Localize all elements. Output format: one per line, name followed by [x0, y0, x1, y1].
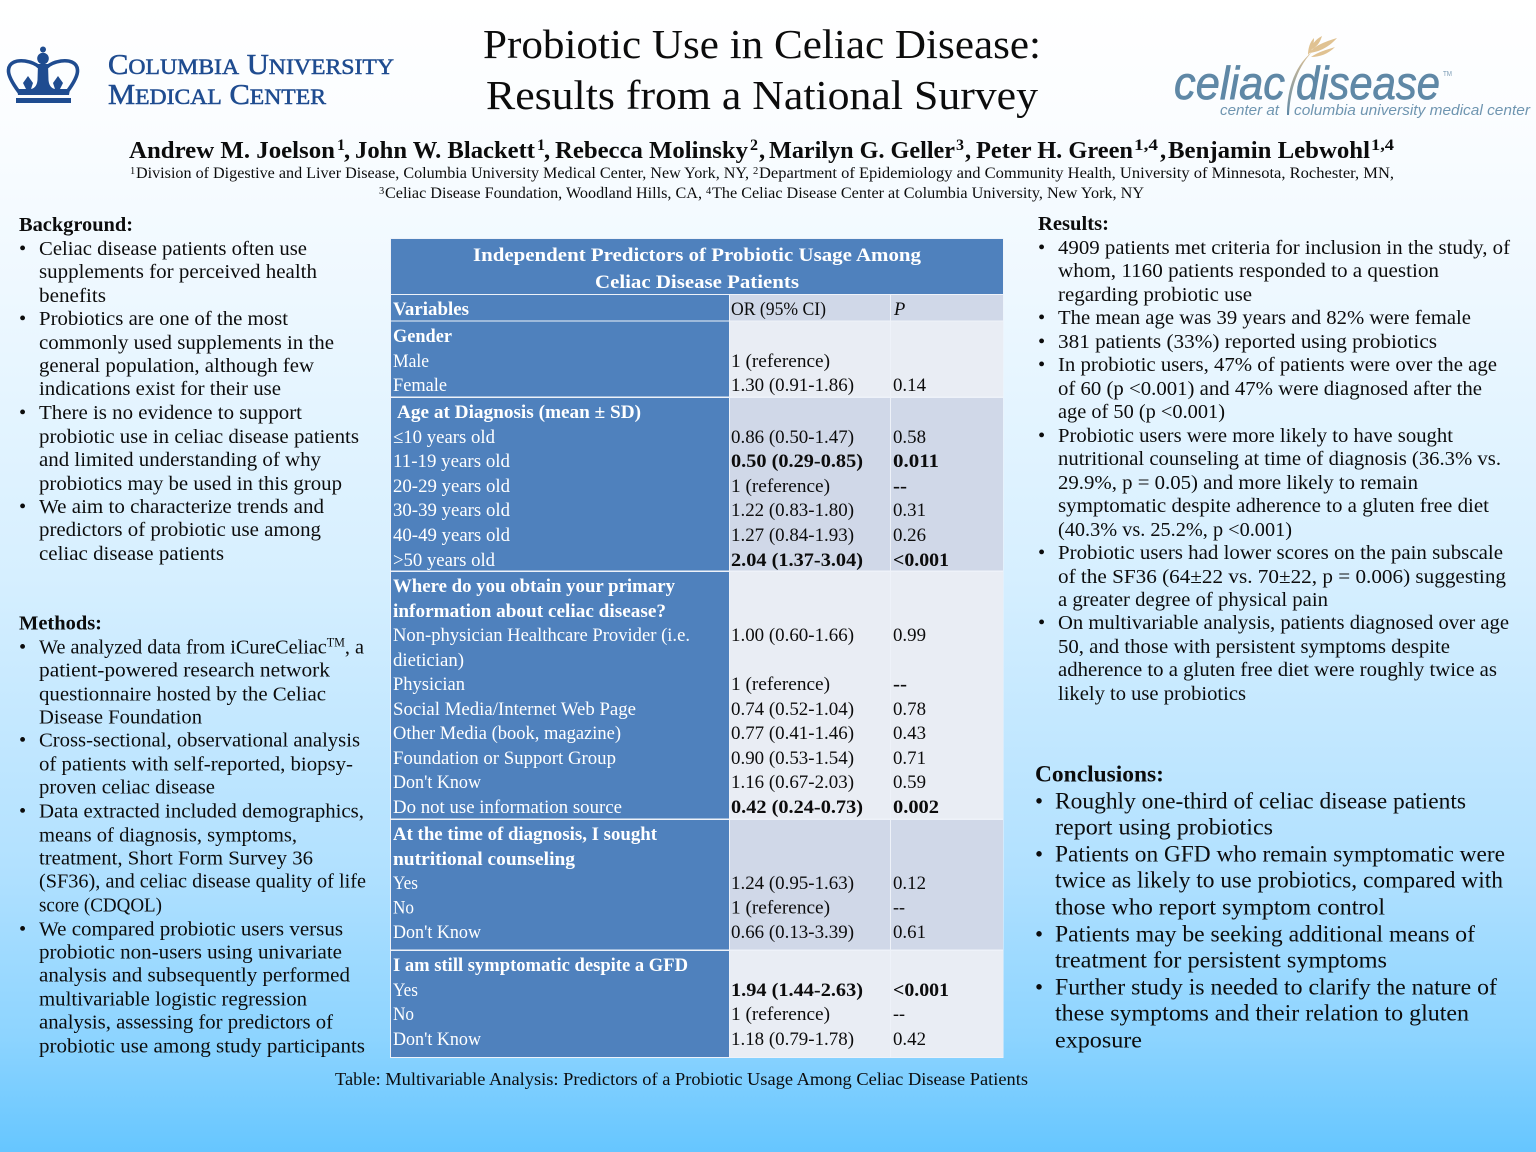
authors: ,: [544, 137, 550, 164]
icon: wheat stalk: [1287, 36, 1337, 115]
section: information source: 0.99: [893, 626, 926, 646]
section: information source: --: [893, 675, 907, 695]
bullet: counseling: Probiotic users were more likely to have sought: [1058, 425, 1453, 447]
section: gender: 1 (reference): [731, 352, 830, 372]
authors: [129, 137, 1394, 164]
section: nutritional counseling: At the time of diagnosis, I sought: [393, 825, 658, 845]
section: information source: 1 (reference): [731, 675, 830, 695]
section: information source: Non-physician Healthcare Provider (i.e.: [393, 626, 690, 646]
bullet: probiotic use rate: 381 patients (33%) reported using probiotics: [1058, 331, 1437, 353]
bullet: data source: patient-powered research network: [39, 660, 331, 682]
section: age at diagnosis: Age at Diagnosis (mean ± SD): [397, 403, 641, 423]
logo wordmark: TM: [1443, 71, 1452, 78]
bullet: common use: Probiotics are one of the most: [39, 308, 288, 330]
bullet: study design: of patients with self-reported, biopsy-: [39, 754, 353, 776]
bullet: further study: •: [1035, 974, 1043, 1000]
bullet: multivariable: On multivariable analysis, patients diagnosed over age: [1058, 612, 1509, 634]
section: age at diagnosis: 1 (reference): [731, 477, 830, 497]
bullet: no evidence: [19, 402, 359, 495]
section: gender: [391, 322, 1003, 396]
section: symptomatic despite GFD: <0.001: [893, 981, 949, 1001]
bullet: common use: general population, although few: [39, 355, 314, 377]
bullet: data extracted: (SF36), and celiac disease quality of life: [39, 871, 366, 893]
bullet: age of users: of 60 (p <0.001) and 47% were diagnosed after the: [1058, 378, 1482, 400]
bullet: data extracted: treatment, Short Form Survey 36: [39, 848, 313, 870]
bullet: analysis: analysis and subsequently performed: [39, 965, 350, 987]
authors: Peter H. Green: [976, 137, 1133, 164]
bullet: analysis: [19, 919, 365, 1058]
bullet: probiotic use rate: •: [1038, 331, 1045, 353]
section: information source: 1.16 (0.67-2.03): [731, 773, 854, 793]
heading: background: Background:: [19, 214, 133, 236]
section: symptomatic despite GFD: 1 (reference): [731, 1005, 830, 1025]
section: information source: 0.74 (0.52-1.04): [731, 700, 854, 720]
section: nutritional counseling: Yes: [393, 874, 418, 894]
bullet: analysis: •: [19, 919, 26, 941]
section: symptomatic despite GFD: 1.18 (0.79-1.78): [731, 1030, 854, 1050]
section: information source: Foundation or Support Group: [393, 749, 616, 769]
heading: conclusions: Conclusions:: [1035, 762, 1164, 786]
affiliations: The Celiac Disease Center at Columbia University, New York, NY: [712, 185, 1144, 202]
table title bar: Independent Predictors of Probiotic Usage Among: [473, 246, 922, 266]
heading: methods: Methods:: [19, 613, 102, 635]
bullet: seeking treatment: [1035, 922, 1475, 972]
logo: Columbia University Medical Center: [8, 46, 394, 111]
bullet: analysis: analysis, assessing for predictors of: [39, 1012, 333, 1034]
bullet: common use: [19, 308, 334, 400]
bullet: counseling: 29.9%, p = 0.05) and more likely to remain: [1058, 472, 1418, 494]
bullet: one third: Roughly one-third of celiac disease patients: [1055, 788, 1466, 814]
bullet: study design: Cross-sectional, observational analysis: [39, 730, 360, 752]
panel: results: [1038, 213, 1510, 705]
table title bar: Celiac Disease Patients: [595, 273, 799, 293]
section: nutritional counseling: Don't Know: [393, 923, 482, 943]
bullet: aim: We aim to characterize trends and: [39, 496, 324, 518]
bullet: counseling: [1038, 425, 1501, 541]
bullet: pain subscale: Probiotic users had lower scores on the pain subscale: [1058, 542, 1503, 564]
affiliations: 2: [753, 166, 758, 177]
section: age at diagnosis: 0.31: [893, 501, 926, 521]
bullet: symptomatic on GFD: •: [1035, 842, 1043, 866]
bullet: one third: [1035, 788, 1466, 840]
bullet: no evidence: probiotics may be used in this group: [39, 473, 342, 495]
section: information source: Don't Know: [393, 773, 482, 793]
bullet: common use: indications exist for their use: [39, 378, 281, 400]
authors: 3: [956, 137, 964, 154]
bullet: analysis: probiotic non-users using univariate: [39, 942, 342, 964]
bullet: data extracted: [19, 801, 366, 917]
logo wordmark: center at: [1220, 102, 1280, 119]
authors: 2: [750, 137, 758, 154]
authors: Rebecca Molinsky: [555, 137, 749, 164]
section: age at diagnosis: 0.86 (0.50-1.47): [731, 428, 854, 448]
section: symptomatic despite GFD: [391, 951, 1003, 1057]
bullet: counseling: symptomatic despite adherence to a gluten free diet: [1058, 495, 1489, 517]
section: symptomatic despite GFD: I am still symptomatic despite a GFD: [393, 956, 688, 976]
logo: Celiac Disease Center: [1174, 36, 1531, 119]
title: Results from a National Survey: [486, 72, 1039, 118]
logo wordmark: MEDICAL CENTER: [108, 79, 326, 111]
bullet: multivariable: •: [1038, 612, 1045, 634]
bullet: pain subscale: •: [1038, 542, 1045, 564]
bullet: analysis: probiotic use among study participants: [39, 1036, 365, 1058]
section: age at diagnosis: 0.011: [893, 452, 939, 472]
section: nutritional counseling: --: [893, 898, 905, 918]
bullet: analysis: multivariable logistic regression: [39, 989, 307, 1011]
icon: Columbia crown: [8, 46, 78, 103]
logo wordmark: celiac: [1174, 57, 1285, 109]
bullet: no evidence: •: [19, 402, 26, 424]
section: symptomatic despite GFD: 0.42: [893, 1030, 926, 1050]
bullet: counseling: (40.3% vs. 25.2%, p <0.001): [1058, 519, 1292, 541]
bullet: seeking treatment: •: [1035, 922, 1043, 946]
table: independent predictors: [390, 238, 1004, 1058]
section: information source: Do not use information source: [393, 798, 622, 818]
section: nutritional counseling: 0.12: [893, 874, 926, 894]
bullet: supplements: [19, 238, 317, 307]
bullet: age of users: [1038, 354, 1497, 423]
bullet: symptomatic on GFD: twice as likely to use probiotics, compared with: [1055, 868, 1504, 892]
section: nutritional counseling: 0.66 (0.13-3.39): [731, 923, 854, 943]
bullet: multivariable: 50, and those with persistent symptoms despite: [1058, 636, 1450, 658]
bullet: study design: proven celiac disease: [39, 777, 215, 799]
bullet: further study: these symptoms and their relation to gluten: [1055, 1000, 1470, 1026]
section: nutritional counseling: nutritional counseling: [393, 850, 576, 870]
bullet: one third: •: [1035, 788, 1043, 814]
section: information source: 0.43: [893, 724, 926, 744]
section: symptomatic despite GFD: --: [893, 1005, 905, 1025]
bullet: inclusion: whom, 1160 patients responded to a question: [1058, 260, 1439, 282]
section: gender: Gender: [393, 327, 452, 347]
bullet: study design: [19, 730, 360, 799]
bullet: data extracted: •: [19, 801, 26, 823]
section: information source: 0.42 (0.24-0.73): [731, 798, 863, 818]
panel: methods: [19, 613, 366, 1058]
section: age at diagnosis: 1.27 (0.84-1.93): [731, 526, 854, 546]
authors: John W. Blackett: [355, 137, 536, 164]
bullet: analysis: We compared probiotic users versus: [39, 919, 343, 941]
section: gender: 1.30 (0.91-1.86): [731, 376, 854, 396]
section: information source: information about celiac disease?: [393, 602, 666, 622]
bullet: data source: [19, 636, 364, 729]
authors: 1,4: [1371, 137, 1394, 154]
bullet: age of users: In probiotic users, 47% of patients were over the age: [1058, 354, 1497, 376]
section: information source: Social Media/Internet Web Page: [393, 700, 636, 720]
bullet: multivariable: likely to use probiotics: [1058, 683, 1246, 705]
bullet: inclusion: [1038, 237, 1510, 306]
bullet: inclusion: regarding probiotic use: [1058, 284, 1252, 306]
affiliations: Department of Epidemiology and Community Health, University of Minnesota, Rochester, MN,: [759, 165, 1394, 182]
section: gender: 0.14: [893, 376, 926, 396]
section: age at diagnosis: 0.58: [893, 428, 926, 448]
authors: Benjamin Lebwohl: [1168, 137, 1370, 164]
section: nutritional counseling: [391, 820, 1003, 950]
logo wordmark: columbia university medical center: [1294, 102, 1531, 119]
authors: 1,4: [1134, 137, 1158, 154]
panel: conclusions: [1035, 762, 1505, 1052]
section: age at diagnosis: [391, 398, 1003, 571]
section: information source: [391, 572, 1003, 818]
bullet: data source: , a: [345, 637, 364, 659]
bullet: multivariable: [1038, 612, 1509, 705]
section: information source: Where do you obtain your primary: [393, 577, 676, 597]
section: information source: Other Media (book, magazine): [393, 724, 621, 744]
section: age at diagnosis: 40-49 years old: [393, 526, 511, 546]
bullet: supplements: •: [19, 238, 26, 260]
bullet: further study: exposure: [1055, 1028, 1142, 1052]
section: age at diagnosis: 20-29 years old: [393, 477, 511, 497]
logo wordmark: disease: [1296, 57, 1440, 109]
bullet: no evidence: and limited understanding of why: [39, 449, 322, 471]
bullet: counseling: •: [1038, 425, 1045, 447]
section: age at diagnosis: --: [893, 477, 907, 497]
bullet: further study: [1035, 974, 1497, 1052]
logo wordmark: COLUMBIA UNIVERSITY: [108, 49, 394, 81]
bullet: pain subscale: [1038, 542, 1506, 611]
section: information source: 0.71: [893, 749, 926, 769]
authors: 1: [537, 137, 545, 154]
title: [483, 21, 1041, 118]
section: nutritional counseling: 1 (reference): [731, 898, 830, 918]
section: symptomatic despite GFD: Don't Know: [393, 1030, 482, 1050]
section: information source: dietician): [393, 651, 464, 671]
section: age at diagnosis: 11-19 years old: [393, 452, 511, 472]
authors: Andrew M. Joelson: [129, 137, 335, 164]
header row: Variables: [393, 300, 469, 320]
section: age at diagnosis: 30-39 years old: [393, 501, 511, 521]
bullet: supplements: supplements for perceived health: [39, 261, 317, 283]
affiliations: [130, 165, 1394, 202]
bullet: data extracted: score (CDQOL): [39, 895, 162, 917]
bullet: one third: report using probiotics: [1055, 814, 1273, 840]
section: age at diagnosis: 2.04 (1.37-3.04): [731, 551, 863, 571]
section: age at diagnosis: 0.50 (0.29-0.85): [731, 452, 863, 472]
bullet: supplements: Celiac disease patients often use: [39, 238, 307, 260]
section: information source: 0.59: [893, 773, 926, 793]
table caption: Table: Multivariable Analysis: Predictors of a Probiotic Usage Among Celiac Disease Patients: [335, 1069, 1028, 1089]
bullet: aim: [19, 496, 324, 565]
bullet: mean age: The mean age was 39 years and 82% were female: [1058, 307, 1471, 329]
bullet: age of users: age of 50 (p <0.001): [1058, 401, 1225, 423]
bullet: pain subscale: a greater degree of physical pain: [1058, 589, 1328, 611]
bullet: supplements: benefits: [39, 285, 106, 307]
authors: ,: [759, 137, 765, 164]
logo wordmark: [108, 49, 394, 111]
authors: ,: [344, 137, 350, 164]
bullet: common use: commonly used supplements in the: [39, 332, 334, 354]
bullet: symptomatic on GFD: Patients on GFD who remain symptomatic were: [1055, 842, 1505, 866]
bullet: no evidence: There is no evidence to support: [39, 402, 302, 424]
bullet: age of users: •: [1038, 354, 1045, 376]
section: information source: 0.78: [893, 700, 926, 720]
panel: background: [19, 214, 359, 565]
bullet: symptomatic on GFD: [1035, 842, 1505, 920]
section: nutritional counseling: 1.24 (0.95-1.63): [731, 874, 854, 894]
section: information source: 0.90 (0.53-1.54): [731, 749, 854, 769]
bullet: common use: •: [19, 308, 26, 330]
authors: 1: [337, 137, 345, 154]
affiliations: Division of Digestive and Liver Disease, Columbia University Medical Center, New York, NY,: [136, 165, 749, 182]
authors: Marilyn G. Geller: [769, 137, 955, 164]
bullet: pain subscale: of the SF36 (64±22 vs. 70±22, p = 0.006) suggesting: [1058, 566, 1506, 588]
bullet: multivariable: adherence to a gluten free diet were roughly twice as: [1058, 659, 1497, 681]
heading: results: Results:: [1038, 213, 1109, 235]
header row: OR (95% CI): [731, 300, 826, 320]
bullet: further study: Further study is needed to clarify the nature of: [1055, 974, 1497, 1000]
bullet: seeking treatment: treatment for persistent symptoms: [1055, 948, 1387, 972]
bullet: counseling: nutritional counseling at time of diagnosis (36.3% vs.: [1058, 448, 1501, 470]
section: information source: 0.002: [893, 798, 939, 818]
bullet: study design: •: [19, 730, 26, 752]
bullet: aim: predictors of probiotic use among: [39, 519, 321, 541]
bullet: no evidence: probiotic use in celiac disease patients: [39, 426, 359, 448]
section: symptomatic despite GFD: 1.94 (1.44-2.63): [731, 981, 863, 1001]
section: nutritional counseling: No: [393, 898, 414, 918]
bullet: aim: celiac disease patients: [39, 543, 224, 565]
bullet: mean age: •: [1038, 307, 1045, 329]
bullet: data source: Disease Foundation: [39, 707, 202, 729]
section: information source: Physician: [393, 675, 465, 695]
section: information source: 0.77 (0.41-1.46): [731, 724, 854, 744]
section: symptomatic despite GFD: No: [393, 1005, 414, 1025]
affiliations: Celiac Disease Foundation, Woodland Hills, CA,: [385, 185, 702, 202]
section: information source: 1.00 (0.60-1.66): [731, 626, 854, 646]
title: Probiotic Use in Celiac Disease:: [483, 21, 1041, 67]
affiliations: 1: [130, 166, 135, 177]
section: age at diagnosis: 1.22 (0.83-1.80): [731, 501, 854, 521]
header row: [391, 295, 1003, 320]
bullet: data source: TM: [327, 636, 345, 650]
bullet: data source: •: [19, 637, 26, 659]
authors: ,: [965, 137, 971, 164]
section: gender: Male: [393, 352, 429, 372]
section: age at diagnosis: ≤10 years old: [393, 428, 496, 448]
logo wordmark: [1174, 57, 1531, 119]
section: symptomatic despite GFD: Yes: [393, 981, 418, 1001]
bullet: data extracted: Data extracted included demographics,: [39, 801, 364, 823]
bullet: data source: We analyzed data from iCureCeliac: [39, 637, 331, 659]
header row: P: [893, 300, 905, 320]
affiliations: 3: [379, 186, 384, 197]
table title bar: [390, 238, 1004, 1058]
bullet: symptomatic on GFD: those who report symptom control: [1055, 894, 1385, 920]
section: nutritional counseling: 0.61: [893, 923, 926, 943]
bullet: seeking treatment: Patients may be seeking additional means of: [1055, 922, 1475, 946]
section: gender: Female: [393, 376, 447, 396]
authors: ,: [1160, 137, 1166, 164]
bullet: inclusion: 4909 patients met criteria for inclusion in the study, of: [1058, 237, 1510, 259]
bullet: data source: questionnaire hosted by the Celiac: [39, 684, 326, 706]
section: age at diagnosis: <0.001: [893, 551, 949, 571]
affiliations: 4: [706, 186, 712, 197]
section: age at diagnosis: >50 years old: [393, 551, 496, 571]
bullet: inclusion: •: [1038, 237, 1045, 259]
section: age at diagnosis: 0.26: [893, 526, 926, 546]
bullet: data extracted: means of diagnosis, symptoms,: [39, 825, 297, 847]
bullet: aim: •: [19, 496, 26, 518]
